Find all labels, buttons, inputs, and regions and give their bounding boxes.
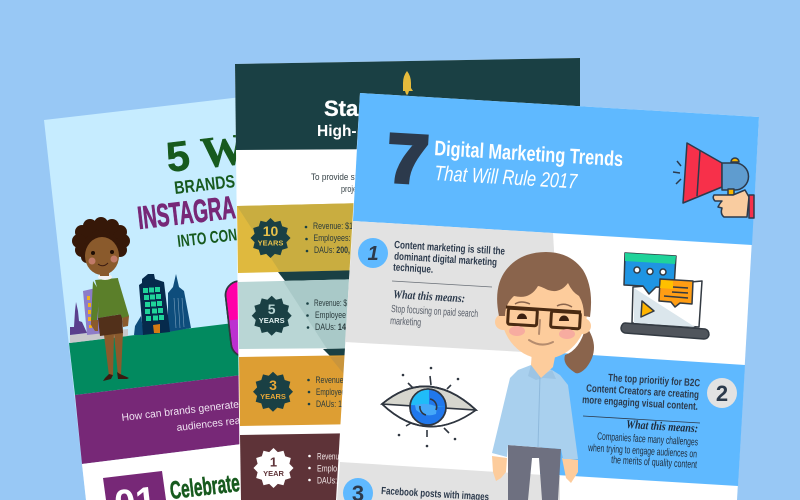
intro text xyxy=(311,172,357,195)
band: 10 years: Revenue: $1 xyxy=(313,221,353,232)
band: 3 years: DAUs: 1 xyxy=(316,399,342,410)
icon: laptop with chat bubbles xyxy=(621,253,709,339)
blue row 2 xyxy=(540,352,745,486)
band: 1 year: DAUs: xyxy=(317,476,337,486)
what this means 1 xyxy=(390,287,478,329)
band: 5 years: YEARS xyxy=(259,316,285,325)
band: 1 year: YEAR xyxy=(263,469,284,478)
hair xyxy=(497,252,591,317)
what this means 1: Stop focusing on paid search xyxy=(391,303,478,320)
band: 5 years: Employee xyxy=(315,310,346,321)
title: 5 W: 5 W xyxy=(164,124,248,182)
icon: megaphone xyxy=(673,143,754,218)
what this means 2 xyxy=(587,417,699,471)
band: 5 years xyxy=(238,279,365,357)
what this means 2: the merits of quality content xyxy=(611,454,697,471)
face xyxy=(501,265,587,359)
what this means 1: What this means: xyxy=(393,287,466,305)
number badge 01 xyxy=(103,471,166,500)
step 1 text: Content marketing is still the xyxy=(394,239,505,258)
character: woman with glasses xyxy=(492,252,594,500)
step 2 text: Content Creators are creating xyxy=(586,383,699,401)
title line 1: Digital Marketing Trends xyxy=(434,137,624,171)
what this means 2: Companies face many challenges xyxy=(597,431,698,448)
step 2 badge xyxy=(707,378,737,408)
band: 10 years xyxy=(237,203,365,281)
intro text block: audiences rea xyxy=(176,415,241,434)
band: 5 years: DAUs: 14 xyxy=(315,322,347,333)
icon: rocket xyxy=(403,71,413,95)
eyebrows xyxy=(515,302,572,307)
neck xyxy=(531,350,556,378)
step 2 text xyxy=(582,372,701,413)
title: Sta: Sta xyxy=(324,96,359,121)
band: 10 years: Employees: xyxy=(314,233,350,244)
band: 3 years: YEARS xyxy=(260,392,286,401)
intro text: proje xyxy=(341,184,357,195)
nose and mouth xyxy=(529,320,553,345)
panel: digital marketing trends card (front) xyxy=(336,93,759,500)
ears xyxy=(495,314,511,330)
ponytail xyxy=(564,326,594,373)
city skyline xyxy=(70,274,191,343)
what this means 2: What this means: xyxy=(626,417,699,435)
intro text: To provide st xyxy=(311,172,357,183)
panel: startup infographic card (middle) xyxy=(235,58,580,500)
grey row 3 xyxy=(337,462,560,500)
icon: eye xyxy=(382,367,476,447)
band: 1 year: Emplo xyxy=(317,464,337,474)
heading: brands: BRANDS xyxy=(173,171,236,198)
heading: into con: INTO CON xyxy=(176,225,238,251)
band: 3 years: Revenue xyxy=(316,375,344,386)
what this means 2: when trying to engage audiences on xyxy=(587,442,697,460)
step 1 text xyxy=(393,239,505,276)
hands xyxy=(492,456,578,483)
Instagram logo xyxy=(224,277,282,358)
panel: Instagram infographic card (left) xyxy=(44,96,282,500)
what this means 1: marketing xyxy=(390,315,422,329)
character: woman in green sweater xyxy=(72,217,130,381)
band: 10 years: DAUs: 200, xyxy=(314,245,350,256)
step 1 badge: 1 xyxy=(367,243,379,265)
step 2 badge: 2 xyxy=(716,381,728,406)
subtitle: High-: High- xyxy=(317,123,357,140)
title line 2: That Will Rule 2017 xyxy=(434,162,579,194)
band: 1 year: Revenu xyxy=(317,452,339,462)
trousers xyxy=(508,445,561,500)
glasses xyxy=(506,307,581,329)
eyes xyxy=(517,314,569,321)
band: 3 years: Employee xyxy=(316,387,345,398)
band: 5 years: 5 xyxy=(268,301,276,317)
shirt xyxy=(492,365,578,459)
big numeral 7: 7 xyxy=(385,120,431,198)
step 2 text: The top prioritiy for B2C xyxy=(608,372,701,389)
step 1 text: dominant digital marketing xyxy=(394,251,497,269)
band: 5 years: Revenue: $ xyxy=(314,298,347,309)
step 3 badge xyxy=(343,478,373,500)
grey row 1 xyxy=(345,221,560,354)
cheeks xyxy=(509,326,525,336)
band: 3 years: 3 xyxy=(269,377,277,393)
heading: instagram: INSTAGRA xyxy=(136,189,237,236)
step 2 text: more engaging visual content. xyxy=(582,394,698,413)
intro text block: How can brands generate xyxy=(121,398,240,424)
band: 10 years: YEARS xyxy=(258,238,283,248)
band: 1 year: 1 xyxy=(270,454,277,470)
band: 1 year xyxy=(240,433,365,500)
step 1 badge xyxy=(358,238,388,268)
band: 10 years: 10 xyxy=(263,223,278,239)
band: 3 years xyxy=(239,355,365,426)
step 1 text: technique. xyxy=(393,262,434,276)
